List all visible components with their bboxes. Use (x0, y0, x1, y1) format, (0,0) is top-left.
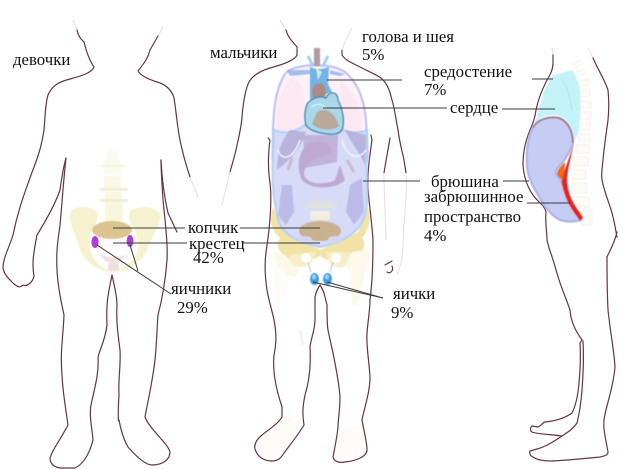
icon: ovaries (91, 235, 133, 248)
label: ovaries: 29% (177, 298, 208, 317)
label: head and neck: 5% (362, 45, 384, 64)
label: coccyx: копчик (188, 218, 239, 237)
panel: abdominal cavity with peritoneum (273, 125, 367, 247)
label: retroperitoneal space: пространство (424, 207, 521, 226)
label: ovaries: яичники (171, 279, 231, 298)
label: peritoneum: брюшина (431, 172, 499, 191)
panel: peritoneum side view (527, 117, 583, 222)
girl body outline (3, 20, 198, 468)
side view body outline (523, 48, 617, 461)
label: heart: сердце (450, 98, 498, 117)
label: head and neck: голова и шея (362, 27, 454, 46)
label: retroperitoneal space: забрюшинное (424, 187, 523, 206)
side view spine (572, 60, 592, 225)
label: boys: мальчики (210, 43, 277, 62)
girl pelvis and spine (70, 150, 161, 272)
label: sacrum: 42% (193, 248, 224, 267)
panel: chest with lungs (273, 65, 368, 160)
label: sacrum: крестец (189, 234, 245, 253)
boy pelvis and legs bones (258, 207, 370, 459)
label: mediastinum: средостение (424, 62, 512, 81)
label: testicles: 9% (391, 303, 413, 322)
label: retroperitoneal space: 4% (424, 226, 446, 245)
icon: heart and great vessels (287, 48, 345, 134)
label: testicles: яички (393, 284, 435, 303)
panel: mediastinum side view (535, 70, 580, 143)
icon: testicles (310, 273, 332, 285)
pointer lines (97, 79, 570, 298)
boy body outline (222, 20, 406, 462)
label: girls: девочки (13, 50, 70, 69)
label: mediastinum: 7% (424, 80, 446, 99)
